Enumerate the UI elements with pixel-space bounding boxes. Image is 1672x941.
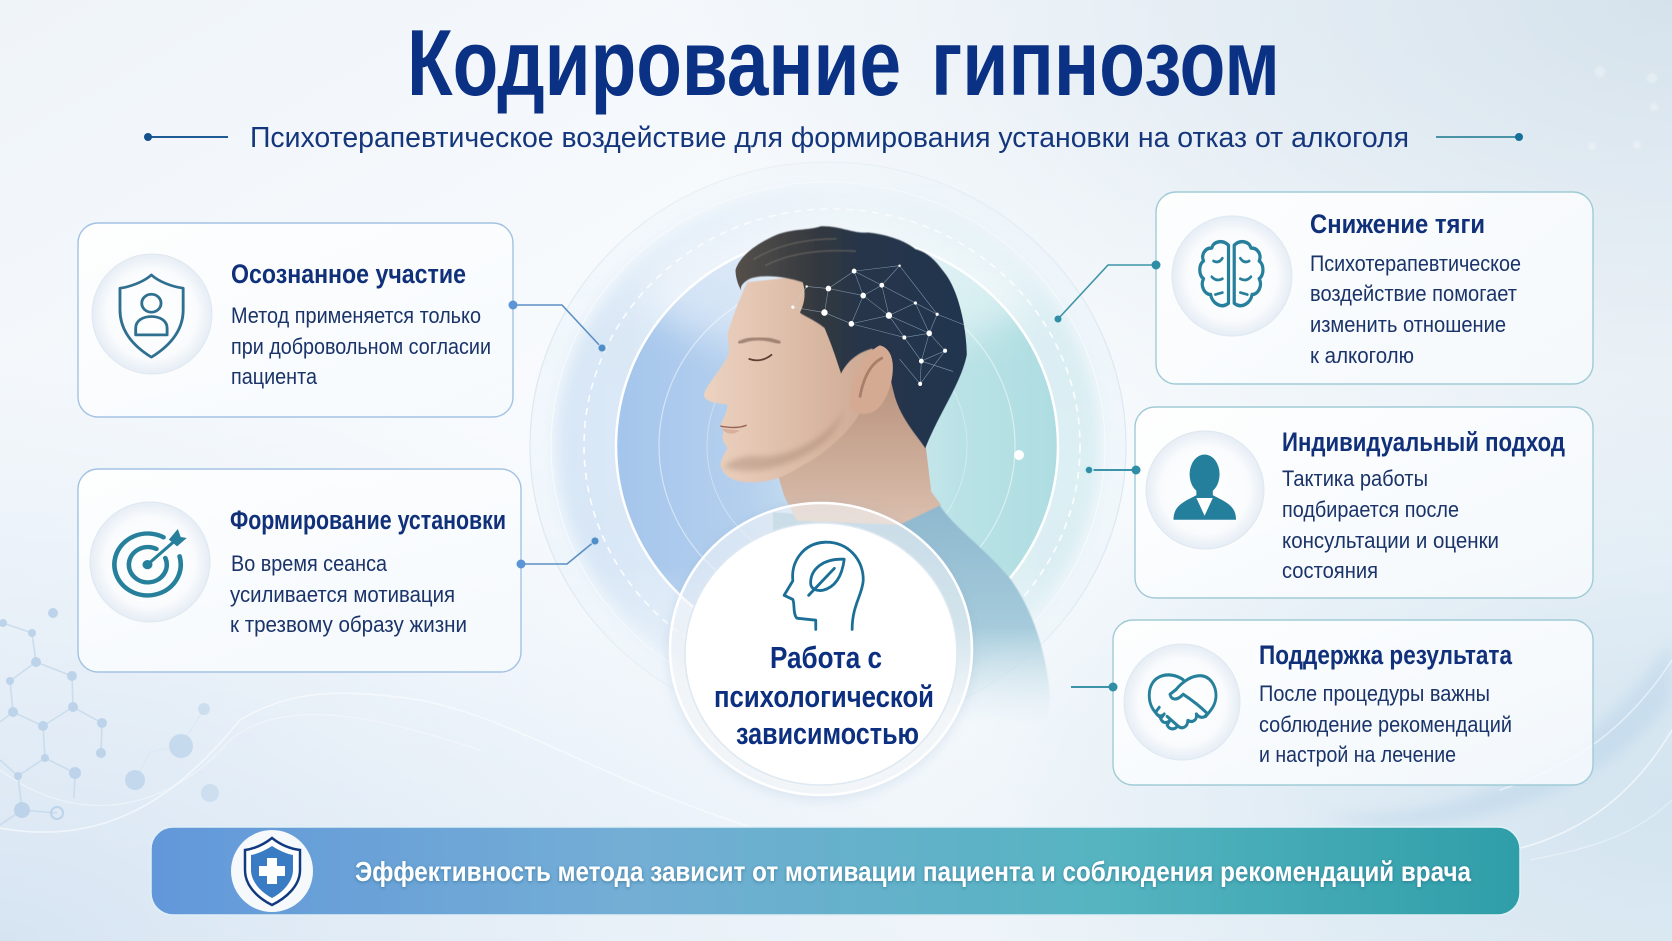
panel: forming attitude [78, 469, 521, 672]
card text: подбирается после [1282, 497, 1459, 522]
ring node [1014, 450, 1024, 460]
card text: Тактика работы [1282, 466, 1428, 491]
card text: Метод применяется только [231, 303, 481, 328]
card text [231, 259, 491, 389]
eye and brow [749, 355, 771, 360]
panel: reduced craving [1156, 192, 1593, 384]
icon: handshake heart [1124, 644, 1240, 760]
card text: к алкоголю [1310, 343, 1414, 368]
card text: и настрой на лечение [1259, 742, 1456, 767]
subtitle decoration right [1436, 133, 1523, 141]
banner text: Эффективность метода зависит от мотивации пациента и соблюдения рекомендаций врача [355, 856, 1471, 887]
icon: target with arrow [90, 502, 210, 622]
panel: informed participation [78, 223, 513, 417]
card text [1259, 640, 1513, 767]
card text: воздействие помогает [1310, 281, 1517, 306]
card text: состояния [1282, 558, 1378, 583]
card text: при добровольном согласии [231, 334, 491, 359]
card text: Поддержка результата [1259, 640, 1513, 670]
icon: person [1146, 431, 1264, 549]
hair strands [753, 239, 856, 266]
central disc with rings [530, 162, 1126, 730]
face [704, 272, 900, 482]
card text: Индивидуальный подход [1282, 427, 1565, 457]
card text: После процедуры важны [1259, 681, 1490, 706]
connector: result support [1071, 682, 1118, 692]
card text [230, 505, 506, 637]
neck [773, 359, 941, 525]
icon: shield with person [92, 254, 212, 374]
connector: reduced craving [1054, 260, 1160, 322]
card text: пациента [231, 364, 318, 389]
panel: individual approach [1135, 407, 1593, 598]
callout text: психологической [714, 679, 934, 714]
central callout: work with psychological dependence [670, 503, 972, 795]
card text: усиливается мотивация [230, 582, 455, 607]
title: гипнозом [931, 10, 1280, 115]
card text: Во время сеанса [231, 551, 388, 576]
sweater [773, 504, 1050, 749]
subtitle: Психотерапевтическое воздействие для формирования установки на отказ от алкоголя [250, 122, 1409, 154]
icon: shield with cross [231, 830, 313, 912]
connector: forming attitude [516, 537, 599, 568]
callout text [714, 640, 934, 751]
subtitle decoration left [144, 133, 228, 141]
jaw stubble shade [724, 411, 843, 471]
card text: Осознанное участие [231, 259, 466, 289]
card text: Снижение тяги [1310, 209, 1485, 239]
card text: Психотерапевтическое [1310, 251, 1521, 276]
neural network [791, 264, 967, 386]
illustration: man in profile with neural network [704, 226, 1050, 749]
card text: Формирование установки [230, 505, 506, 535]
card text: к трезвому образу жизни [230, 612, 467, 637]
icon: head with leaf [784, 542, 863, 629]
icon: brain [1172, 216, 1292, 336]
bottom banner [151, 827, 1520, 915]
ear [850, 345, 893, 414]
callout text: зависимостью [736, 716, 919, 751]
panel: result support [1113, 620, 1593, 785]
mouth [721, 425, 746, 428]
connector: informed participation [508, 300, 606, 352]
connector: individual approach [1085, 466, 1140, 474]
title: Кодирование [407, 10, 901, 115]
card text: консультации и оценки [1282, 528, 1499, 553]
card text [1310, 209, 1521, 368]
card text: соблюдение рекомендаций [1259, 712, 1512, 737]
hair [735, 226, 967, 448]
card text: изменить отношение [1310, 312, 1506, 337]
callout text: Работа с [770, 640, 882, 675]
card text [1282, 427, 1565, 583]
